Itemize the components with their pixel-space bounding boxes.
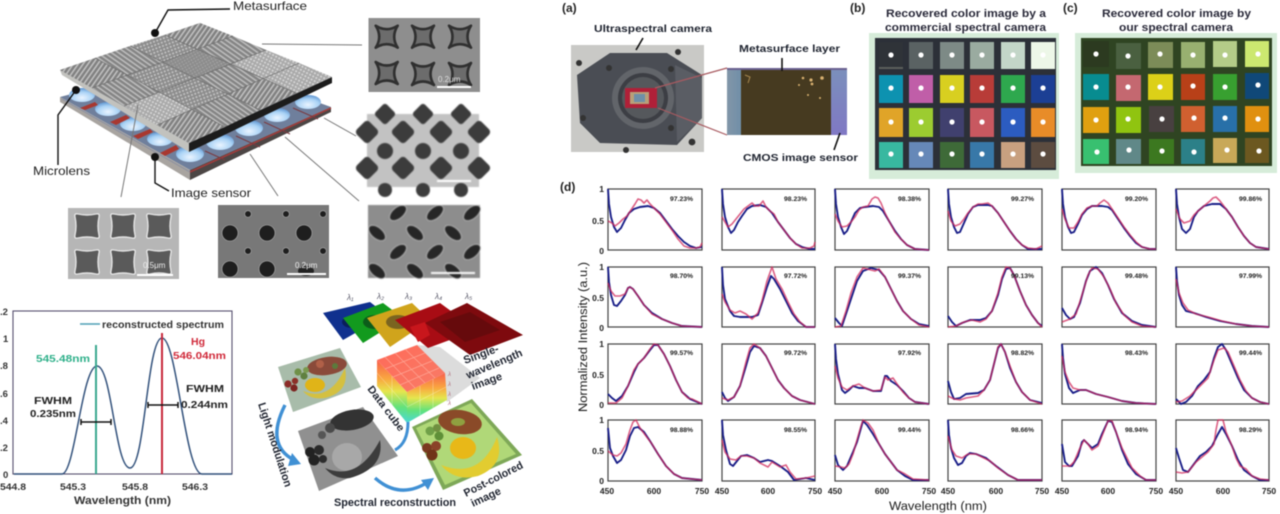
plot r4c1 (608, 420, 702, 481)
SEM inset: concave cross holes (368, 18, 480, 92)
x tick labels: 750 (1149, 486, 1163, 496)
y tick labels: 0.5 (592, 216, 604, 226)
FWHM left: FWHM (34, 395, 72, 407)
plot r2c6: 97.99% (1239, 273, 1262, 280)
plot r2c2: 97.72% (784, 273, 807, 280)
label: ultraspectral camera (594, 23, 712, 50)
plot r4c5: 98.94% (1125, 427, 1148, 434)
label: Hg peak (173, 336, 226, 362)
y tick labels: 1 (599, 339, 604, 349)
SEM inset: rounded squares (68, 208, 179, 279)
plot r2c3 (835, 267, 929, 327)
plot r4c6: 98.29% (1239, 427, 1262, 434)
arrow: spectral reconstruction (375, 478, 434, 490)
plot r1c6 (1176, 189, 1269, 250)
label: spectral reconstruction: Spectral reconstruction (334, 497, 456, 509)
x tick labels: 600 (875, 486, 889, 496)
plot r1c5 (1062, 189, 1156, 250)
modulated grey image (297, 405, 403, 497)
plot r3c1: 99.57% (670, 350, 693, 357)
axis ticks and labels (0, 307, 208, 493)
post-colored image (412, 399, 522, 490)
axis ticks and labels: .6 (0, 389, 8, 400)
plot r4c3: 99.44% (898, 427, 921, 434)
x tick labels: 750 (1262, 486, 1276, 496)
x tick labels: 600 (1216, 486, 1230, 496)
plot r2c4 (948, 267, 1042, 327)
plot r4c2 (722, 420, 815, 481)
heading: (b): (b) (850, 1, 865, 15)
y tick labels: 0.5 (592, 370, 604, 380)
SEM inset: circular holes (218, 205, 329, 278)
y tick labels: 1 (599, 262, 604, 272)
green line (95, 345, 97, 474)
x tick labels (600, 486, 1276, 496)
plot r2c2 (722, 267, 815, 327)
axis ticks and labels: 0 (3, 470, 8, 481)
plot r1c4 (948, 189, 1042, 250)
label: light modulation: Light modulation (255, 401, 294, 489)
plot r2c6 (1176, 267, 1269, 327)
label: post-colored image: Post-colored (462, 459, 525, 500)
FWHM right: 0.244nm (181, 399, 228, 411)
plot r2c4: 99.13% (1011, 273, 1034, 280)
axis ticks and labels: 545.8 (122, 482, 148, 493)
legend: reconstructed spectrum (102, 320, 224, 331)
label: data cube: Data cube (365, 384, 407, 434)
plot r3c4 (948, 344, 1042, 404)
cube wavelength labels: λ (447, 372, 451, 378)
y tick labels: 1 (599, 184, 604, 194)
data cube (377, 345, 447, 423)
label: ultraspectral camera: Ultraspectral camera (594, 23, 712, 35)
plot r4c5 (1062, 420, 1156, 481)
plot r4c6 (1176, 420, 1269, 481)
label: metasurface layer (739, 43, 840, 71)
label: Hg peak: 546.04nm (173, 350, 226, 362)
wavelength labels: λ₂ (376, 292, 384, 301)
background shadow (417, 345, 480, 402)
y tick labels: 0.5 (592, 446, 604, 456)
plot r1c1 (608, 189, 702, 250)
panel: color chart c (1075, 33, 1277, 173)
FWHM right (148, 383, 228, 411)
plot r3c3 (835, 344, 929, 404)
plot r4c2: 98.55% (784, 427, 807, 434)
plot r1c2 (722, 189, 815, 250)
y tick labels: 0 (599, 476, 604, 486)
leader lines to SEM insets (121, 44, 362, 201)
panel: metasurface device schematic (33, 0, 362, 201)
plot r2c1 (608, 267, 702, 327)
plot r1c1: 97.23% (670, 196, 693, 203)
x axis title: Wavelength (nm) (74, 495, 171, 507)
single-wavelength image stack (323, 302, 523, 355)
callout: image sensor (151, 153, 251, 200)
SEM inset: concave cross holes: 0.2μm (438, 75, 461, 84)
x tick labels: 750 (695, 486, 709, 496)
plot r4c1: 98.88% (670, 427, 693, 434)
panel: color chart b (869, 33, 1059, 179)
red line (161, 333, 163, 474)
SEM inset: circular holes: 0.2μm (295, 261, 318, 270)
plot r3c1 (608, 344, 702, 404)
callout: metasurface (151, 0, 307, 37)
plot r3c3: 97.92% (898, 350, 921, 357)
plot r1c3: 98.38% (898, 196, 921, 203)
plot r3c2: 99.72% (784, 350, 807, 357)
plot r1c4: 99.27% (1011, 196, 1034, 203)
x tick labels: 450 (1055, 486, 1069, 496)
title: commercial camera (885, 8, 1047, 34)
plot r4c4: 98.66% (1011, 427, 1034, 434)
zoom lines (655, 68, 727, 135)
plot r1c3 (835, 189, 929, 250)
wavelength labels: λ₁ (346, 293, 354, 302)
heading: (d): (d) (560, 180, 575, 194)
cube wavelength labels: λ (447, 401, 451, 407)
title: commercial camera: Recovered color image by a (886, 8, 1047, 20)
SEM inset: diamonds and circles (354, 102, 491, 198)
SEM inset: rounded squares: 0.5μm (143, 261, 166, 270)
y tick labels (592, 184, 604, 486)
axis ticks and labels: .2 (0, 307, 8, 318)
label: single-wavelength image (462, 343, 525, 393)
axis ticks and labels: 545.3 (60, 482, 86, 493)
x tick labels: 450 (600, 486, 614, 496)
FWHM left: 0.235nm (30, 408, 76, 420)
cube wavelength labels (447, 372, 451, 407)
title: our camera: Recovered color image by (1102, 8, 1252, 20)
y axis title: Normalized Intensity (a.u.) (578, 262, 590, 412)
wavelength labels: λ₄ (434, 292, 442, 301)
spectrum curve (14, 338, 232, 474)
x tick labels: 450 (715, 486, 729, 496)
label: post-colored image: image (469, 485, 503, 510)
plot r2c1: 98.70% (670, 273, 693, 280)
cube wavelength labels: λ (447, 392, 451, 398)
y tick labels: 0 (599, 400, 604, 410)
x tick labels: 600 (647, 486, 661, 496)
axis ticks and labels: 544.8 (0, 482, 26, 493)
label: metasurface layer: Metasurface layer (739, 43, 840, 55)
x tick labels: 600 (1101, 486, 1115, 496)
FWHM right: FWHM (186, 383, 224, 395)
label: single-wavelength image: Single- (462, 343, 501, 367)
x tick labels: 450 (1169, 486, 1183, 496)
callout: microlens (33, 86, 90, 178)
callout: image sensor: Image sensor (171, 186, 251, 200)
title: our camera (1102, 8, 1252, 34)
chart: reconstructed spectrum (0, 307, 232, 507)
label: single-wavelength image: image (470, 371, 504, 393)
input image (278, 348, 361, 412)
panel: metasurface layer micrograph (727, 68, 847, 135)
arrow: cube link (395, 422, 408, 450)
cube wavelength labels: λ (447, 382, 451, 388)
plot r3c5 (1062, 344, 1156, 404)
y tick labels: 0 (599, 323, 604, 333)
wavelength labels (346, 292, 473, 302)
label: single-wavelength image: wavelength (464, 347, 525, 382)
title: our camera: our spectral camera (1119, 22, 1234, 34)
label: green peak: 545.48nm (36, 353, 90, 365)
plot r2c5 (1062, 267, 1156, 327)
axis ticks and labels: 1 (3, 334, 9, 345)
plot r2c3: 99.37% (898, 273, 921, 280)
axis ticks and labels: .8 (0, 361, 8, 372)
heading: (a): (a) (562, 1, 577, 15)
arrow: light modulation (277, 405, 301, 466)
microlens array (69, 88, 321, 162)
label: CMOS image sensor: CMOS image sensor (743, 152, 858, 164)
plot r1c6: 99.86% (1239, 196, 1262, 203)
x tick labels: 600 (761, 486, 775, 496)
wavelength labels: λ₃ (404, 292, 412, 301)
image sensor layer (60, 60, 331, 180)
x tick labels: 750 (922, 486, 936, 496)
x axis title: Wavelength (nm) (889, 501, 987, 513)
y tick labels: 0 (599, 246, 604, 256)
plot r3c4: 98.82% (1011, 350, 1034, 357)
title: commercial camera: commercial spectral camera (885, 22, 1047, 34)
plot r3c6 (1176, 344, 1269, 404)
panel: imaging pipeline (255, 292, 525, 510)
plot r2c5: 99.48% (1125, 273, 1148, 280)
sensor in camera (625, 88, 657, 108)
FWHM left (30, 395, 111, 425)
axis ticks and labels: .2 (0, 443, 8, 454)
axis ticks and labels: 546.3 (182, 482, 208, 493)
metasurface plate (60, 23, 332, 152)
x tick labels: 450 (941, 486, 955, 496)
callout: microlens: Microlens (33, 164, 90, 178)
plot r1c2: 98.23% (784, 196, 807, 203)
label: Hg peak: Hg (191, 336, 205, 348)
panel: camera photo (571, 45, 704, 153)
label: CMOS image sensor (743, 133, 858, 164)
axis ticks and labels: .4 (0, 416, 9, 427)
y tick labels: 1 (599, 415, 604, 425)
heading: (c): (c) (1063, 1, 1078, 15)
x tick labels: 750 (808, 486, 822, 496)
plot r4c3 (835, 420, 929, 481)
x tick labels: 450 (828, 486, 842, 496)
plot r3c2 (722, 344, 815, 404)
x tick labels: 600 (989, 486, 1003, 496)
wavelength labels: λ₅ (464, 292, 473, 301)
x tick labels: 750 (1035, 486, 1049, 496)
SEM inset: tilted ellipses (367, 204, 482, 280)
y tick labels: 0.5 (592, 293, 604, 303)
plot r4c4 (948, 420, 1042, 481)
plot r1c5: 99.20% (1125, 196, 1148, 203)
plot r3c5: 98.43% (1125, 350, 1148, 357)
plot r3c6: 99.44% (1239, 350, 1262, 357)
